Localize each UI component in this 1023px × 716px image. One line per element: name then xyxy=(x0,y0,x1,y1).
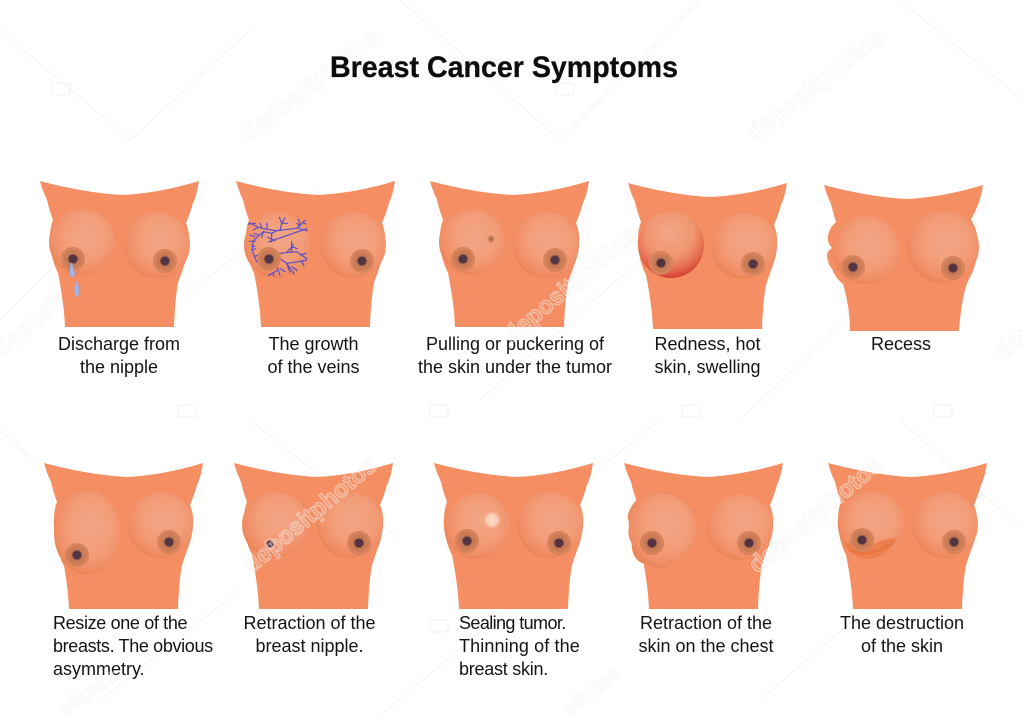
panel: discharge from the nipple xyxy=(40,181,199,377)
icon: discharge drops xyxy=(70,263,79,297)
panel: retraction of the breast nipple xyxy=(234,463,393,656)
torso and breasts xyxy=(628,183,787,329)
title: Breast Cancer Symptoms xyxy=(330,51,678,84)
torso and breasts xyxy=(44,463,203,609)
watermark layer: depositphotos xyxy=(237,24,384,147)
caption: Thinning of the xyxy=(459,636,580,656)
caption: the skin under the tumor xyxy=(418,357,612,377)
watermark overlay: depositphotos xyxy=(239,452,383,579)
caption: Sealing tumor. xyxy=(459,613,566,633)
panel: growth of the veins xyxy=(236,181,395,377)
nipples xyxy=(257,247,374,273)
icon: skin lesion xyxy=(844,538,898,559)
torso and breasts xyxy=(624,463,783,609)
watermark overlay xyxy=(54,222,888,716)
icon: veins xyxy=(249,217,307,276)
torso and breasts xyxy=(430,181,589,327)
watermark layer: depositphotos xyxy=(742,24,889,147)
caption: breast nipple. xyxy=(255,636,364,656)
torso and breasts xyxy=(824,185,983,331)
watermark overlay: depositphotos xyxy=(744,452,888,579)
red swollen breast xyxy=(638,212,704,278)
torso and breasts xyxy=(236,181,395,327)
caption: breasts. The obvious xyxy=(53,636,213,656)
panel: destruction of the skin xyxy=(828,463,987,656)
caption: Recess xyxy=(871,334,931,354)
lumpy skin xyxy=(628,493,698,569)
caption: Redness, hot xyxy=(654,334,761,354)
panel: redness, hot skin, swelling xyxy=(628,183,787,377)
icon: tumor xyxy=(484,512,500,528)
panel: pulling or puckering of the skin xyxy=(418,181,612,377)
caption: Resize one of the xyxy=(53,613,187,633)
caption: breast skin. xyxy=(459,659,548,679)
caption: skin, swelling xyxy=(654,357,761,377)
caption: Retraction of the xyxy=(640,613,772,633)
caption: Retraction of the xyxy=(243,613,376,633)
caption: of the skin xyxy=(861,636,943,656)
panel: sealing tumor xyxy=(434,463,593,679)
torso and breasts xyxy=(234,463,393,609)
caption: of the veins xyxy=(267,357,360,377)
caption: Discharge from xyxy=(58,334,180,354)
caption: skin on the chest xyxy=(638,636,774,656)
watermark overlay: depositphotos xyxy=(499,222,643,349)
caption: The growth xyxy=(268,334,359,354)
caption: The destruction xyxy=(840,613,964,633)
panel: retraction of the skin on the chest xyxy=(624,463,783,656)
caption: Pulling or puckering of xyxy=(426,334,605,354)
torso and breasts xyxy=(434,463,593,609)
panel: recess xyxy=(824,185,983,354)
caption: asymmetry. xyxy=(53,659,145,679)
torso and breasts xyxy=(828,463,987,609)
icon: retracted nipple xyxy=(264,538,276,550)
torso and breasts xyxy=(40,181,199,327)
caption: the nipple xyxy=(80,357,158,377)
panel: resize one of the breasts xyxy=(44,463,213,679)
icon: skin dimple xyxy=(486,234,496,244)
